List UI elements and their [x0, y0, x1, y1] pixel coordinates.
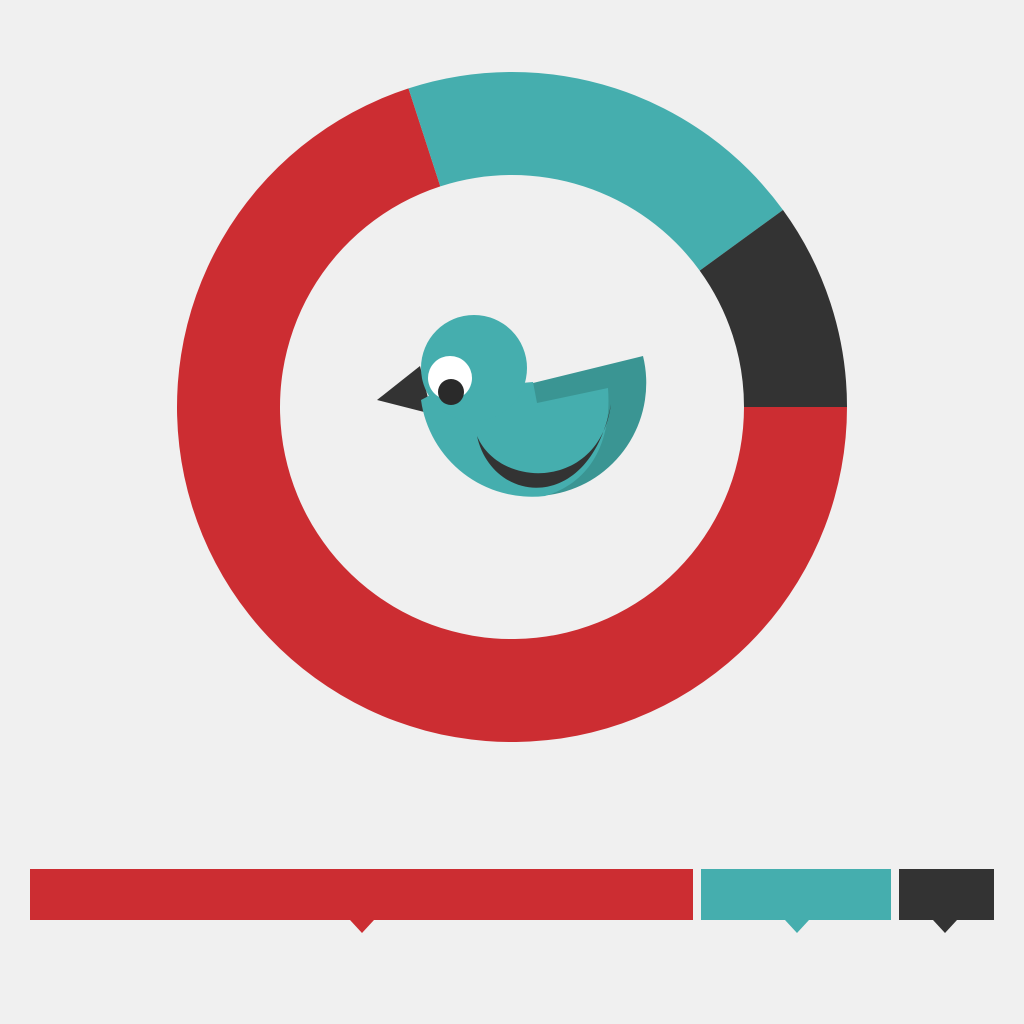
- donut segment: red: [177, 88, 847, 742]
- icon: bird: [377, 315, 646, 497]
- bird head: [421, 315, 527, 421]
- bird body light: [421, 382, 608, 497]
- donut chart: [177, 72, 847, 742]
- bird body dark: [423, 356, 646, 496]
- bird smile: [477, 404, 611, 488]
- pointer: [785, 920, 809, 933]
- pointer: [350, 920, 374, 933]
- pointer: [933, 920, 957, 933]
- donut segment: teal: [408, 72, 783, 271]
- bird eye: [428, 356, 472, 400]
- bar: black: [899, 869, 994, 933]
- bar: red: [30, 869, 693, 933]
- donut segment: black: [700, 210, 847, 407]
- bar: teal: [701, 869, 891, 933]
- bird beak: [377, 366, 432, 414]
